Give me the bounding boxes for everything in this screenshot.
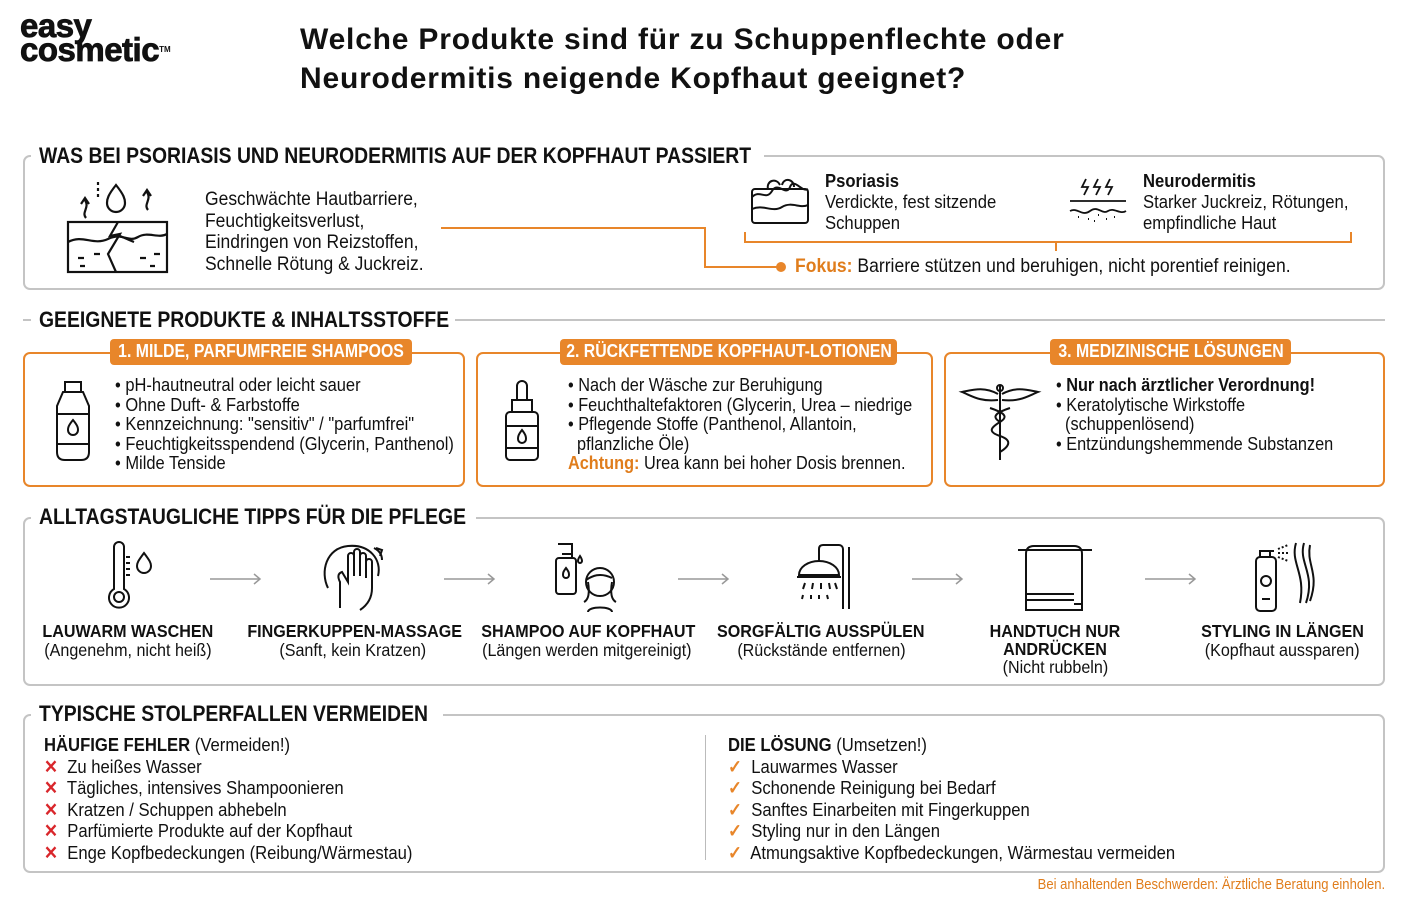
text: psoriasis [825, 170, 996, 233]
text: lotion bullets [568, 374, 912, 473]
panel: pitfalls [23, 714, 1385, 873]
list: solutions: ✓ Styling nur in den Längen [728, 820, 940, 841]
logo: easy [20, 7, 91, 44]
text: psoriasis: Verdickte, fest sitzende [825, 191, 996, 212]
heading: what happens: WAS BEI PSORIASIS UND NEURODERMITIS AUF DER KOPFHAUT PASSIERT [39, 143, 751, 168]
icon: thermometer [108, 541, 152, 609]
panel: medical [944, 352, 1385, 487]
panel: what happens [23, 155, 1385, 290]
text: lotion bullets: pflanzliche Öle) [577, 433, 689, 454]
text: HANDTUCH NUR [990, 621, 1120, 641]
icon: shower [797, 544, 850, 609]
tab: shampoos: 1. MILDE, PARFUMFREIE SHAMPOOS [118, 341, 404, 361]
text: (Längen werden mitgereinigt) [482, 640, 692, 660]
labels: tips [43, 621, 213, 660]
panel: tips [23, 517, 1385, 686]
list: mistakes [44, 734, 412, 863]
text: barrier: Schnelle Rötung & Juckreiz. [205, 254, 424, 275]
text: lotion bullets: Achtung: Urea kann bei hoher Dosis brennen. [568, 452, 906, 473]
text: medical bullets: • Entzündungshemmende Substanzen [1056, 433, 1333, 454]
labels: tips: (Angenehm, nicht heiß) [44, 640, 212, 660]
list: solutions: ✓ Schonende Reinigung bei Bedarf [728, 777, 996, 798]
text: neurodermitis: Neurodermitis [1143, 170, 1256, 191]
text: STYLING IN LÄNGEN [1201, 621, 1363, 641]
list: mistakes: ✕ Tägliches, intensives Shampoonieren [44, 777, 344, 798]
icon: caduceus [958, 384, 1042, 460]
arrows [210, 574, 1196, 584]
text: shampoo bullets: • Feuchtigkeitsspendend (Glycerin, Panthenol) [115, 433, 454, 454]
footer note: Bei anhaltenden Beschwerden: Ärztliche Beratung einholen. [1037, 877, 1385, 893]
icon: shampoo head [555, 543, 616, 612]
text: shampoo bullets: • Ohne Duft- & Farbstoffe [115, 394, 300, 415]
text: shampoo bullets: • Milde Tenside [115, 452, 226, 473]
text: (Sanft, kein Kratzen) [280, 640, 426, 660]
labels: tips: LAUWARM WASCHEN [43, 621, 213, 641]
icon: spray [1255, 542, 1315, 612]
text: barrier: Feuchtigkeitsverlust, [205, 211, 364, 232]
list: solutions: DIE LÖSUNG (Umsetzen!) [728, 734, 927, 755]
text: barrier: Geschwächte Hautbarriere, [205, 189, 418, 210]
logo [20, 7, 171, 68]
text: SHAMPOO AUF KOPFHAUT [481, 621, 695, 641]
text: medical bullets: • Keratolytische Wirkstoffe [1056, 394, 1245, 415]
text: FINGERKUPPEN-MASSAGE [247, 621, 462, 641]
list: solutions [728, 734, 1175, 863]
icon: dropper [505, 380, 539, 461]
text: ANDRÜCKEN [1003, 639, 1107, 659]
list: mistakes: ✕ Parfümierte Produkte auf der Kopfhaut [44, 820, 352, 841]
heading: pitfalls: TYPISCHE STOLPERFALLEN VERMEIDEN [39, 701, 428, 726]
text: SORGFÄLTIG AUSSPÜLEN [717, 621, 925, 641]
icon: towel [1018, 545, 1092, 611]
text: (Nicht rubbeln) [1002, 657, 1108, 677]
heading: tips: ALLTAGSTAUGLICHE TIPPS FÜR DIE PFLEGE [39, 504, 466, 529]
title: Welche Produkte sind für zu Schuppenflechte oder [300, 23, 1065, 56]
text: neurodermitis: Starker Juckreiz, Rötungen, [1143, 191, 1348, 212]
list: mistakes: ✕ Kratzen / Schuppen abhebeln [44, 798, 287, 820]
list: mistakes: HÄUFIGE FEHLER (Vermeiden!) [44, 734, 290, 755]
list: mistakes: ✕ Enge Kopfbedeckungen (Reibung/Wärmestau) [44, 842, 412, 862]
title: Neurodermitis neigende Kopfhaut geeignet? [300, 62, 966, 95]
text: neurodermitis [1143, 170, 1348, 233]
logo: cosmeticTM [20, 31, 171, 68]
connector line [441, 227, 1352, 272]
icon: bottle [56, 381, 90, 461]
text: (Kopfhaut aussparen) [1205, 640, 1359, 660]
panel: shampoos [23, 352, 465, 487]
text: medical bullets: (schuppenlösend) [1065, 413, 1194, 434]
list: solutions: ✓ Lauwarmes Wasser [728, 756, 898, 776]
text: lotion bullets: • Nach der Wäsche zur Beruhigung [568, 374, 823, 395]
tab: lotions: 2. RÜCKFETTENDE KOPFHAUT-LOTIONEN [566, 341, 891, 361]
heading: products [23, 319, 1385, 321]
text: shampoo bullets [115, 374, 454, 473]
text: psoriasis: Schuppen [825, 212, 900, 233]
text: focus: Fokus: Barriere stützen und beruhigen, nicht porentief reinigen. [795, 255, 1291, 277]
icon: massage [324, 544, 384, 611]
text: barrier: Eindringen von Reizstoffen, [205, 232, 418, 253]
tab: medical: 3. MEDIZINISCHE LÖSUNGEN [1058, 341, 1283, 361]
text: barrier [205, 189, 424, 275]
text: medical bullets: • Nur nach ärztlicher Verordnung! [1056, 374, 1315, 395]
text: medical bullets [1056, 374, 1333, 454]
list: solutions: ✓ Sanftes Einarbeiten mit Fingerkuppen [728, 798, 1030, 820]
panel: lotions [476, 352, 933, 487]
list: mistakes: ✕ Zu heißes Wasser [44, 756, 202, 776]
title [300, 23, 1065, 95]
text: (Rückstände entfernen) [737, 640, 905, 660]
icon: psoriasis [751, 178, 809, 224]
text: shampoo bullets: • pH-hautneutral oder leicht sauer [115, 374, 361, 395]
list: solutions: ✓ Atmungsaktive Kopfbedeckungen, Wärmestau vermeiden [728, 842, 1175, 862]
text: lotion bullets: • Feuchthaltefaktoren (Glycerin, Urea – niedrige [568, 394, 912, 415]
text: GEEIGNETE PRODUKTE & INHALTSSTOFFE [39, 307, 449, 332]
text: shampoo bullets: • Kennzeichnung: "sensitiv" / "parfumfrei" [115, 413, 414, 434]
icon: neurodermitis [1070, 178, 1126, 222]
text: psoriasis: Psoriasis [825, 170, 899, 191]
text: lotion bullets: • Pflegende Stoffe (Panthenol, Allantoin, [568, 413, 857, 434]
icon: skin barrier [66, 182, 168, 274]
text: neurodermitis: empfindliche Haut [1143, 212, 1276, 233]
